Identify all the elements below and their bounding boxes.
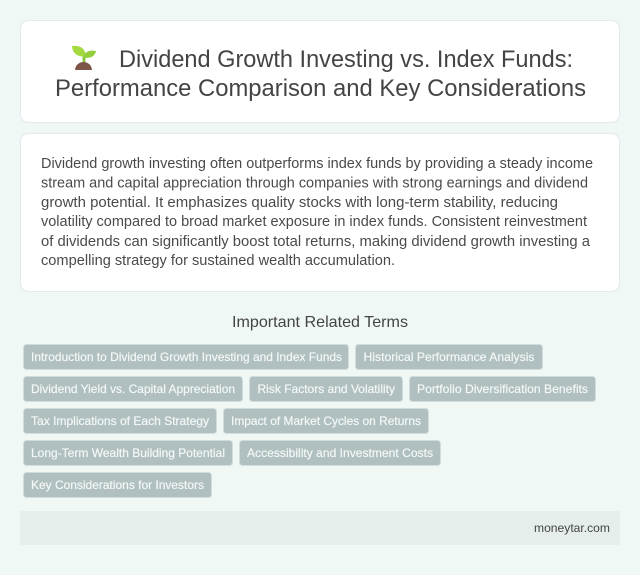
tag: Introduction to Dividend Growth Investing and Index Funds: [31, 350, 342, 364]
tag: Long-Term Wealth Building Potential: [31, 446, 225, 460]
summary paragraph: Dividend growth investing often outperforms index funds by providing a steady income: [41, 156, 593, 172]
heading: important related terms: Important Related Terms: [232, 314, 408, 331]
tag: Historical Performance Analysis: [364, 350, 534, 364]
title line 1: Dividend Growth Investing vs. Index Funds:: [119, 46, 573, 73]
summary paragraph: compelling strategy for sustained wealth accumulation.: [41, 253, 395, 269]
tag: Risk Factors and Volatility: [258, 382, 395, 396]
panel: related terms tags: [24, 344, 596, 498]
tag: Accessibility and Investment Costs: [247, 446, 433, 460]
tag: [24, 376, 242, 402]
tag: Tax Implications of Each Strategy: [31, 414, 209, 428]
footer bar: [20, 511, 620, 545]
icon: seedling: [72, 46, 96, 70]
tag: [24, 472, 212, 498]
footer source: moneytar.com: [534, 521, 610, 535]
tag: Impact of Market Cycles on Returns: [231, 414, 421, 428]
panel: title card: [20, 20, 620, 122]
tag: Dividend Yield vs. Capital Appreciation: [31, 382, 235, 396]
summary paragraph: volatility compared to broad market exposure in index funds. Consistent reinvestment: [41, 214, 587, 230]
tag: Key Considerations for Investors: [31, 478, 204, 492]
summary paragraph: [41, 156, 593, 269]
tag: [240, 440, 440, 466]
panel: summary card: [20, 134, 620, 292]
summary paragraph: stream and capital appreciation through companies with strong earnings and dividend: [41, 176, 588, 192]
tag: [410, 376, 596, 402]
tag: [24, 408, 216, 434]
title line 2: Performance Comparison and Key Considerations: [55, 75, 586, 102]
tag: Portfolio Diversification Benefits: [417, 382, 588, 396]
tag: [356, 344, 542, 370]
summary paragraph: of dividends can significantly boost total returns, making dividend growth investing a: [41, 234, 591, 250]
tag: [250, 376, 402, 402]
tag: [24, 440, 232, 466]
tag: [24, 344, 348, 370]
tag: [224, 408, 428, 434]
summary paragraph: growth potential. It emphasizes quality stocks with long-term stability, reducing: [41, 195, 558, 211]
